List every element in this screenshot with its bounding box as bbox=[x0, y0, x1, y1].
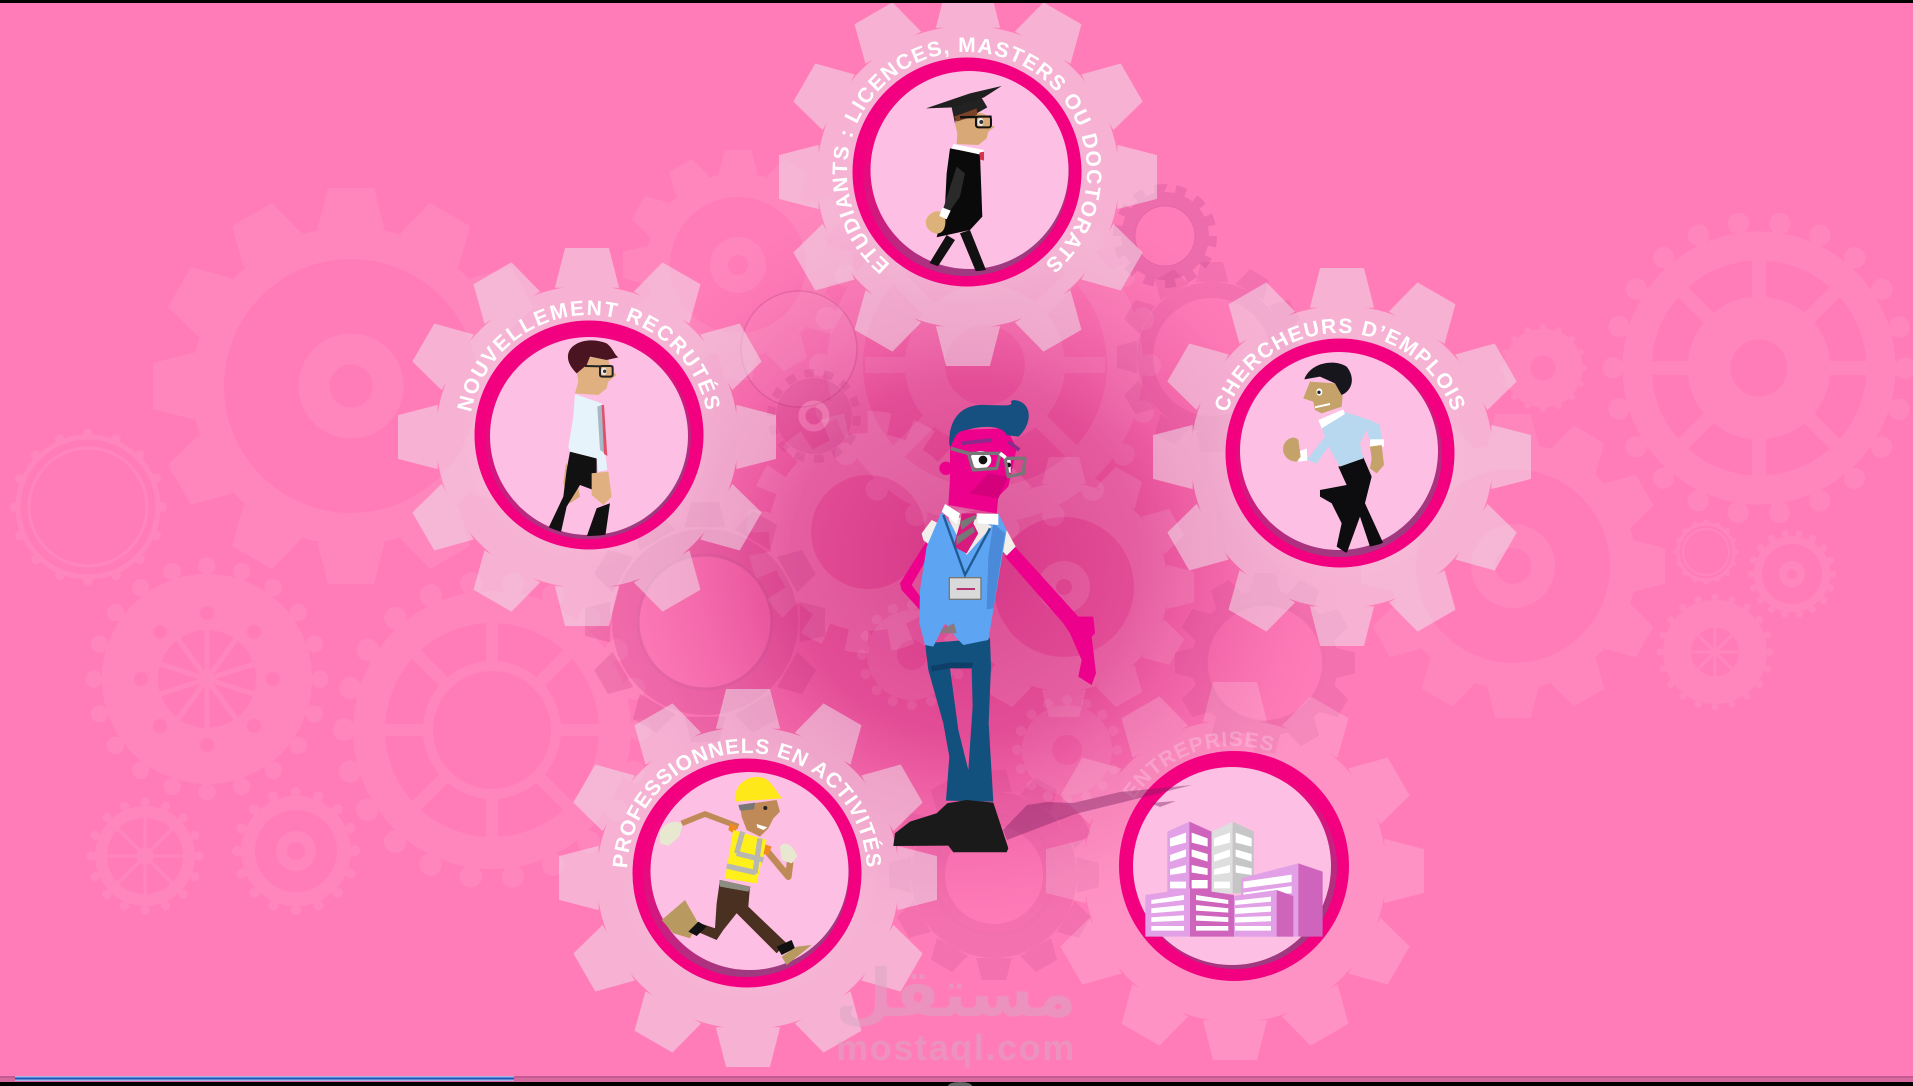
central dark glow bbox=[500, 100, 1450, 1050]
gear: dark lower right bbox=[1175, 573, 1355, 753]
gear shape bbox=[779, 0, 1157, 366]
gear: small right bbox=[1502, 327, 1584, 409]
ring and disc bbox=[1119, 751, 1349, 981]
label: Professionnels en activités: PROFESSIONNELS EN ACTIVITÉS bbox=[612, 738, 883, 868]
watermark: mostaql: mostaql.com bbox=[836, 1027, 1076, 1068]
gear: large left bbox=[153, 188, 549, 584]
back arm bbox=[900, 538, 932, 610]
figure: graduate bbox=[926, 86, 1002, 273]
gear: dark small upper right bbox=[1119, 190, 1211, 282]
label: Entreprises: ENTREPRISES bbox=[1122, 732, 1274, 799]
gear: wide spoked left bbox=[344, 582, 640, 878]
ring and disc bbox=[832, 37, 1102, 307]
background gears: centre cluster bbox=[585, 150, 1355, 980]
ring and disc bbox=[454, 300, 724, 570]
top black edge bbox=[0, 0, 1913, 3]
gear: small bottom left bbox=[237, 792, 355, 910]
gear: small ring right bbox=[1676, 522, 1736, 582]
label: Nouvellement recrutés: NOUVELLEMENT RECRUTÉS bbox=[457, 300, 720, 412]
gear: centre right disc bbox=[934, 457, 1194, 717]
panel: Etudiants gear bbox=[779, 3, 1157, 366]
sleeves bbox=[922, 520, 1016, 556]
gear: spoked left bbox=[94, 566, 320, 792]
watermark: mostaql: مستقل bbox=[835, 955, 1077, 1032]
shadow of main figure bbox=[1003, 785, 1192, 840]
panel: Professionnels en activités gear bbox=[559, 689, 937, 1067]
gear shape bbox=[398, 248, 776, 626]
gear: large right spoked bbox=[1613, 222, 1905, 514]
hair bbox=[949, 400, 1029, 447]
panel: Entreprises gear bbox=[1046, 682, 1424, 1060]
gear: small hub right bbox=[1751, 533, 1833, 615]
figure: job seeker bbox=[1283, 363, 1384, 553]
ring and disc bbox=[1205, 318, 1475, 588]
figure: construction worker bbox=[660, 777, 812, 965]
trousers bbox=[925, 638, 993, 802]
gear: upper left centre bbox=[623, 150, 853, 380]
gear: dark right behind job seekers bbox=[1117, 262, 1307, 452]
vest bbox=[919, 512, 1007, 647]
gear: small spoked right bbox=[1660, 597, 1770, 707]
figure: new recruit bbox=[548, 340, 618, 538]
name badge bbox=[949, 578, 981, 599]
gear: small light behind legs bbox=[862, 605, 962, 705]
watermark: mostaql bbox=[835, 955, 1077, 1068]
bottom black edge bbox=[0, 1082, 1913, 1086]
gear: right mid bbox=[1361, 414, 1665, 718]
gear: dark bottom under figure bbox=[889, 770, 1099, 980]
gear: centre left disc bbox=[760, 424, 976, 640]
gear: small ring far left bbox=[14, 433, 162, 581]
gear: dark lower left bbox=[585, 502, 825, 742]
gear holes: spoked left dots bbox=[134, 606, 280, 752]
main figure: man with blue vest bbox=[893, 400, 1096, 852]
video progress bar bbox=[0, 1076, 1913, 1082]
gear shape bbox=[559, 689, 937, 1067]
gear: outline disc upper left bbox=[741, 291, 857, 407]
shoes bbox=[893, 800, 1008, 852]
gear: centre top spoked bbox=[820, 200, 1150, 530]
gear: small dark near centre bbox=[771, 373, 857, 459]
gear shape bbox=[1046, 682, 1424, 1060]
front arm bbox=[1005, 547, 1096, 685]
label: Chercheurs d'emplois: CHERCHEURS D’EMPLOIS bbox=[1216, 318, 1464, 410]
panel: Nouvellement recrutés gear bbox=[398, 248, 776, 626]
icon: buildings bbox=[1145, 822, 1323, 937]
gear shape bbox=[1153, 268, 1531, 646]
head bbox=[948, 428, 1017, 513]
background gears: left and right bbox=[14, 188, 1905, 910]
label: Etudiants: ETUDIANTS : LICENCES, MASTERS OU DOCTORATS bbox=[832, 38, 1102, 274]
gear: small light right of legs bbox=[1017, 700, 1117, 800]
glasses bbox=[970, 451, 991, 469]
panel: Chercheurs d'emplois gear bbox=[1153, 268, 1531, 646]
gear: small spoked bottom left bbox=[91, 802, 199, 910]
shirt and tie bbox=[948, 517, 992, 555]
ring and disc bbox=[612, 738, 882, 1008]
